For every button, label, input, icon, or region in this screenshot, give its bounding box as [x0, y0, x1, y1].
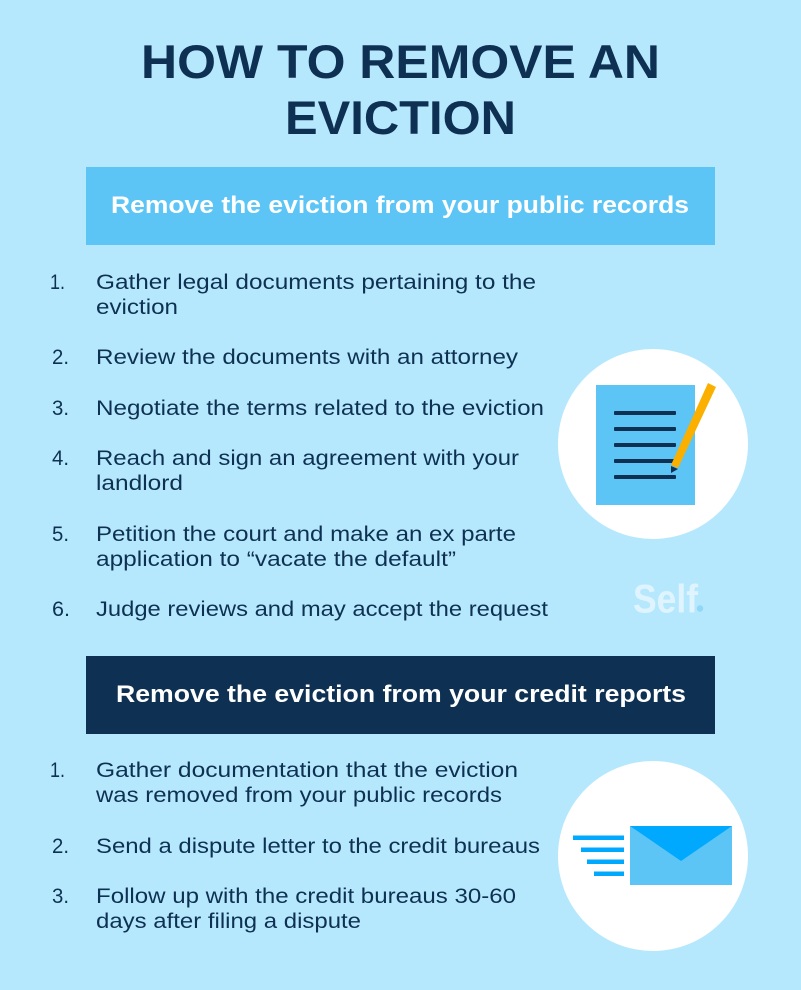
text block: public records steps: 2. — [52, 345, 69, 369]
text block: credit reports steps: was removed from your public records — [95, 783, 502, 807]
text block: credit reports steps: 1. — [50, 758, 65, 782]
text block: public records steps: 1. — [50, 270, 65, 294]
text block: public records steps — [50, 270, 548, 621]
text block: credit reports steps: 2. — [52, 834, 69, 858]
text block: public records steps: 4. — [52, 446, 69, 470]
title: EVICTION — [285, 91, 516, 144]
text block: public records steps: Negotiate the terms related to the eviction — [96, 396, 544, 420]
text block: public records steps: 5. — [52, 522, 69, 546]
title: HOW TO REMOVE AN — [141, 35, 660, 88]
logo: Self: Self — [633, 578, 699, 622]
text block: public records steps: application to “vacate the default” — [96, 547, 456, 571]
icon: document and pencil — [558, 349, 748, 539]
text block: public records steps: Petition the court and make an ex parte — [96, 522, 516, 546]
text block: credit reports steps: Send a dispute letter to the credit bureaus — [96, 834, 540, 858]
text block: public records steps: 6. — [52, 597, 70, 621]
text block: public records steps: eviction — [96, 295, 178, 319]
text block: public records steps: Gather legal documents pertaining to the — [96, 270, 536, 294]
panel: public records heading — [86, 167, 715, 245]
text block: public records steps: Review the documents with an attorney — [96, 345, 518, 369]
text block: credit reports steps: Gather documentation that the eviction — [96, 758, 518, 782]
text block: credit reports steps: days after filing a dispute — [96, 909, 361, 933]
text block: credit reports steps: Follow up with the credit bureaus 30-60 — [96, 884, 516, 908]
text block: public records steps: 3. — [52, 396, 69, 420]
text block: public records steps: Judge reviews and may accept the request — [96, 597, 548, 621]
panel: credit reports heading — [86, 656, 715, 734]
title — [141, 35, 660, 144]
text block: public records steps: Reach and sign an agreement with your — [96, 446, 519, 470]
text block: credit reports steps — [50, 758, 540, 933]
icon: envelope — [558, 761, 748, 951]
text block: public records steps: landlord — [96, 471, 183, 495]
panel: public records heading: Remove the eviction from your public records — [111, 192, 689, 219]
text block: credit reports steps: 3. — [52, 884, 69, 908]
panel: credit reports heading: Remove the eviction from your credit reports — [116, 681, 686, 708]
